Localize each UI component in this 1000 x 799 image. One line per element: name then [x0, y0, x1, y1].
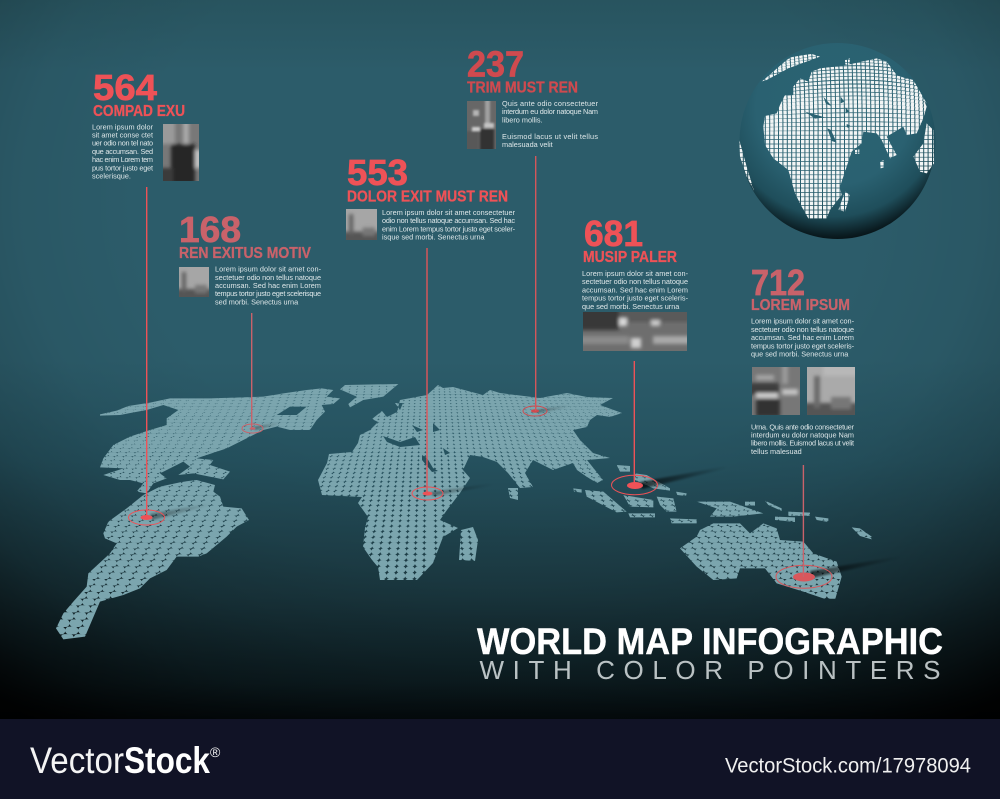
- callout: 712 lorem ipsum: [749, 262, 859, 456]
- text block: [382, 208, 516, 242]
- number: 553: [347, 152, 408, 193]
- pointer shadow: [254, 422, 282, 430]
- number: 564: [93, 67, 157, 108]
- pointer: 712: [776, 465, 902, 588]
- heading: DOLOR EXIT MUST REN: [347, 189, 508, 206]
- text block: scelerisque.: [92, 172, 131, 180]
- text block: libero mollis. Euismod lacus ut velit: [751, 439, 854, 448]
- logo bold part: Stock: [124, 740, 210, 781]
- callout: 237 trim must ren: [465, 44, 599, 151]
- text block: interdum eu dolor natoque Nam: [502, 107, 598, 116]
- pointer dot: [250, 427, 256, 430]
- text block: hac enim Lorem tem: [92, 155, 153, 164]
- number: 712: [751, 262, 805, 303]
- text block: tellus malesuad: [751, 447, 802, 456]
- map: europe asia africa: [318, 385, 622, 580]
- text block: sectetuer odio non tellus natoque: [751, 325, 854, 334]
- text block: accumsan. Sed hac enim Lorem: [751, 333, 854, 342]
- text block: isque sed morbi. Senectus urna: [382, 233, 486, 242]
- text block: interdum eu dolor natoque Nam: [751, 430, 854, 440]
- pointer shadow: [150, 503, 212, 520]
- text block: accumsan. Sed hac enim Lorem: [582, 285, 688, 294]
- title line 2: WITH COLOR POINTERS: [480, 655, 940, 685]
- pointer ring: [128, 510, 164, 525]
- text block: enim Lorem tempus tortor justo eget sceler-: [382, 224, 516, 233]
- pointer dot: [140, 515, 152, 520]
- pointer line: [634, 361, 635, 485]
- pointer dot: [422, 492, 432, 496]
- globe dotted land: [739, 51, 934, 218]
- text block: que accumsan. Sed: [92, 147, 153, 156]
- callout: 553 dolor exit must ren: [343, 152, 516, 244]
- pointer line: [146, 187, 147, 517]
- pointer shadow: [537, 405, 570, 413]
- pointer shadow: [640, 466, 728, 489]
- text block: sed morbi. Senectus urna: [215, 297, 299, 306]
- text block: libero mollis.: [502, 115, 543, 124]
- pointer ring: [523, 406, 547, 416]
- pointer dot: [531, 409, 539, 413]
- text block: malesuada velit: [502, 140, 553, 149]
- text block: accumsan. Sed hac enim Lorem: [215, 281, 321, 290]
- text block: sectetuer odio non tellus natoque: [215, 273, 321, 282]
- photo: [583, 312, 687, 351]
- photo: [163, 124, 199, 181]
- map: asia pacific islands and australia: [573, 465, 872, 600]
- pointer: 681: [612, 361, 728, 495]
- pointer: 237: [523, 156, 570, 416]
- text block: Lorem ipsum dolor sit amet con-: [215, 265, 322, 274]
- text block: Lorem ipsum dolor sit amet consectetuer: [382, 208, 516, 217]
- title: [477, 620, 943, 685]
- heading: TRIM MUST REN: [467, 79, 578, 96]
- text block: uer odio non tel nato: [92, 139, 153, 148]
- pointer dot: [627, 482, 643, 489]
- pointer dot: [793, 572, 815, 582]
- pointer: 553: [412, 248, 495, 500]
- pointer ring: [242, 424, 263, 433]
- globe sphere: [740, 43, 936, 239]
- number: 681: [584, 213, 643, 254]
- pointer ring: [776, 565, 832, 588]
- heading: MUSIP PALER: [583, 249, 677, 266]
- text block: que sed morbi. Senectus urna: [751, 350, 849, 358]
- text block: [502, 99, 599, 149]
- text block: Lorem ipsum dolor sit amet con-: [582, 269, 689, 278]
- text block: Euismod lacus ut velit tellus: [502, 132, 598, 141]
- title line 1: WORLD MAP INFOGRAPHIC: [477, 620, 943, 662]
- photo: [467, 101, 496, 149]
- dotted world map: [56, 384, 872, 639]
- text block: Lorem ipsum dolor sit amet con-: [751, 317, 855, 326]
- photo: [346, 209, 377, 240]
- registered mark: ®: [210, 744, 221, 760]
- photo: [179, 267, 209, 297]
- text block: odio non tellus natoque accumsan. Sed hac: [382, 216, 515, 225]
- callout: 168 ren exitus motiv: [176, 209, 322, 306]
- text block: [582, 269, 689, 311]
- text block: pus tortor justo eget: [92, 163, 153, 172]
- text block: [751, 317, 855, 358]
- text block: que sed morbi. Senectus urna: [582, 302, 680, 311]
- callout: 564 compad exu: [92, 67, 201, 184]
- heading: LOREM IPSUM: [751, 297, 850, 314]
- text block: tempus tortor justo eget sceleris-: [582, 294, 689, 303]
- footer bar: [0, 719, 1000, 799]
- text block: sit amet conse ctet: [92, 130, 153, 140]
- text block: [92, 122, 154, 180]
- pointer: 564: [128, 187, 212, 525]
- pointer line: [803, 465, 804, 577]
- pointer shadow: [431, 483, 495, 496]
- pointer ring: [612, 475, 658, 495]
- text block: sectetuer odio non tellus natoque: [582, 277, 688, 286]
- text block: tempus tortor justo eget scelerisque: [215, 289, 321, 298]
- text block: tempus tortor justo eget sceleris-: [751, 341, 855, 350]
- photo right: [807, 367, 855, 415]
- heading: COMPAD EXU: [93, 103, 185, 120]
- pointer line: [426, 248, 428, 493]
- text block: Quis ante odio consectetuer: [502, 99, 599, 108]
- number: 237: [467, 44, 524, 85]
- callout: 681 musip paler: [579, 213, 691, 351]
- image id: VectorStock.com/17978094: [725, 754, 971, 778]
- pointer line: [251, 313, 252, 428]
- pointer line: [535, 156, 536, 411]
- heading: REN EXITUS MOTIV: [179, 245, 311, 262]
- pointer: 168: [242, 313, 282, 433]
- pointer shadow: [810, 556, 902, 578]
- photo left: [752, 367, 800, 415]
- globe: [739, 43, 936, 239]
- map: americas: [56, 384, 398, 639]
- text block: [751, 422, 855, 456]
- text block: Lorem ipsum dolor: [92, 122, 154, 131]
- text block: Urna. Quis ante odio consectetuer: [751, 422, 855, 431]
- text block: [215, 265, 322, 306]
- logo: Vector: [30, 740, 124, 781]
- pointer ring: [412, 487, 443, 500]
- number: 168: [179, 209, 241, 250]
